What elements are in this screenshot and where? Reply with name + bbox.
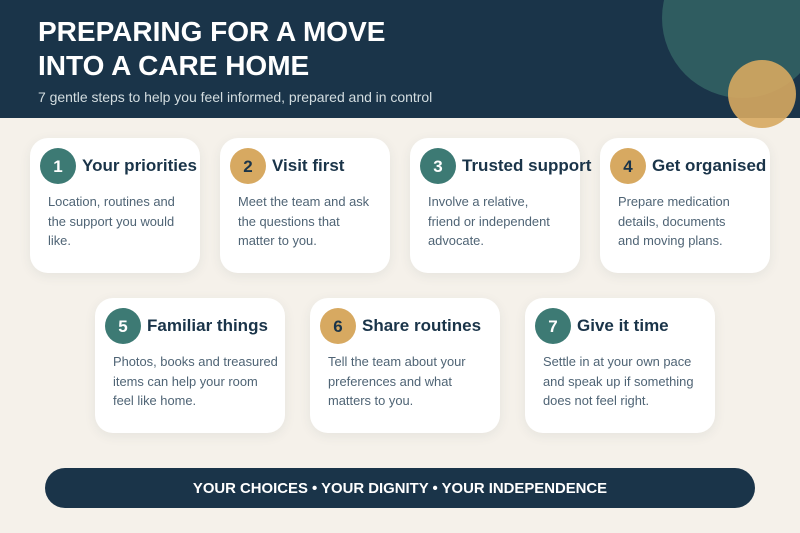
step number 2: 2 <box>243 157 253 176</box>
decorative gold circle <box>728 60 796 128</box>
card 1 text: the support you would <box>48 214 174 228</box>
header band <box>0 0 800 118</box>
decorative teal circle <box>662 0 800 98</box>
card 3 text: advocate. <box>428 233 484 248</box>
card 2 text: matter to you. <box>238 233 317 248</box>
footer banner: YOUR CHOICES • YOUR DIGNITY • YOUR INDEPENDENCE <box>193 481 607 497</box>
card 1: your priorities <box>30 138 200 273</box>
card 6 text: matters to you. <box>328 393 413 408</box>
card 5 text <box>113 354 278 408</box>
card 7 text <box>543 354 694 408</box>
step number 4: 4 <box>623 157 633 176</box>
card 6 text <box>328 354 466 408</box>
card 5 heading: Familiar things <box>147 316 268 335</box>
card 1 heading: Your priorities <box>82 156 197 175</box>
card 2: visit first <box>220 138 390 273</box>
card 3 text: Involve a relative, <box>428 194 528 209</box>
step number 2 <box>230 148 266 184</box>
card 3 text: friend or independent <box>428 214 550 228</box>
step number 7: 7 <box>548 317 558 336</box>
card 6 heading: Share routines <box>362 316 481 335</box>
title: INTO A CARE HOME <box>38 50 309 81</box>
step number 6 <box>320 308 356 344</box>
card 2 heading: Visit first <box>272 156 344 175</box>
card 4 text: and moving plans. <box>618 233 723 248</box>
card 6 text: preferences and what <box>328 374 452 388</box>
step number 1: 1 <box>53 157 63 176</box>
card 1 text <box>48 194 175 248</box>
step number 4 <box>610 148 646 184</box>
footer banner <box>45 468 755 508</box>
card 4 text <box>618 194 730 248</box>
card 1 text: like. <box>48 233 71 248</box>
card 7 text: and speak up if something <box>543 374 694 388</box>
card 6: share routines <box>310 298 500 433</box>
card 4 text: Prepare medication <box>618 194 730 209</box>
card 4 text: details, documents <box>618 214 725 228</box>
card 3 heading: Trusted support <box>462 156 591 175</box>
card 4: get organised <box>600 138 770 273</box>
step number 5 <box>105 308 141 344</box>
subtitle: 7 gentle steps to help you feel informed, prepared and in control <box>38 89 432 105</box>
card 2 text: the questions that <box>238 214 340 228</box>
card 7: give it time <box>525 298 715 433</box>
step number 7 <box>535 308 571 344</box>
card 3 text <box>428 194 550 248</box>
step number 1 <box>40 148 76 184</box>
card 7 text: does not feel right. <box>543 393 649 408</box>
card 5 text: feel like home. <box>113 393 196 408</box>
card 7 text: Settle in at your own pace <box>543 354 691 369</box>
card 3: trusted support <box>410 138 580 273</box>
card 2 text: Meet the team and ask <box>238 194 369 209</box>
card 1 text: Location, routines and <box>48 194 175 209</box>
card 5 text: items can help your room <box>113 374 258 388</box>
card 5 text: Photos, books and treasured <box>113 354 278 369</box>
step number 6: 6 <box>333 317 343 336</box>
step number 3 <box>420 148 456 184</box>
card 4 heading: Get organised <box>652 156 766 175</box>
step number 3: 3 <box>433 157 443 176</box>
card 6 text: Tell the team about your <box>328 354 466 369</box>
step number 5: 5 <box>118 317 128 336</box>
title: PREPARING FOR A MOVE <box>38 16 385 47</box>
card 7 heading: Give it time <box>577 316 669 335</box>
card 2 text <box>238 194 369 248</box>
title <box>38 16 385 81</box>
card 5: familiar things <box>95 298 285 433</box>
